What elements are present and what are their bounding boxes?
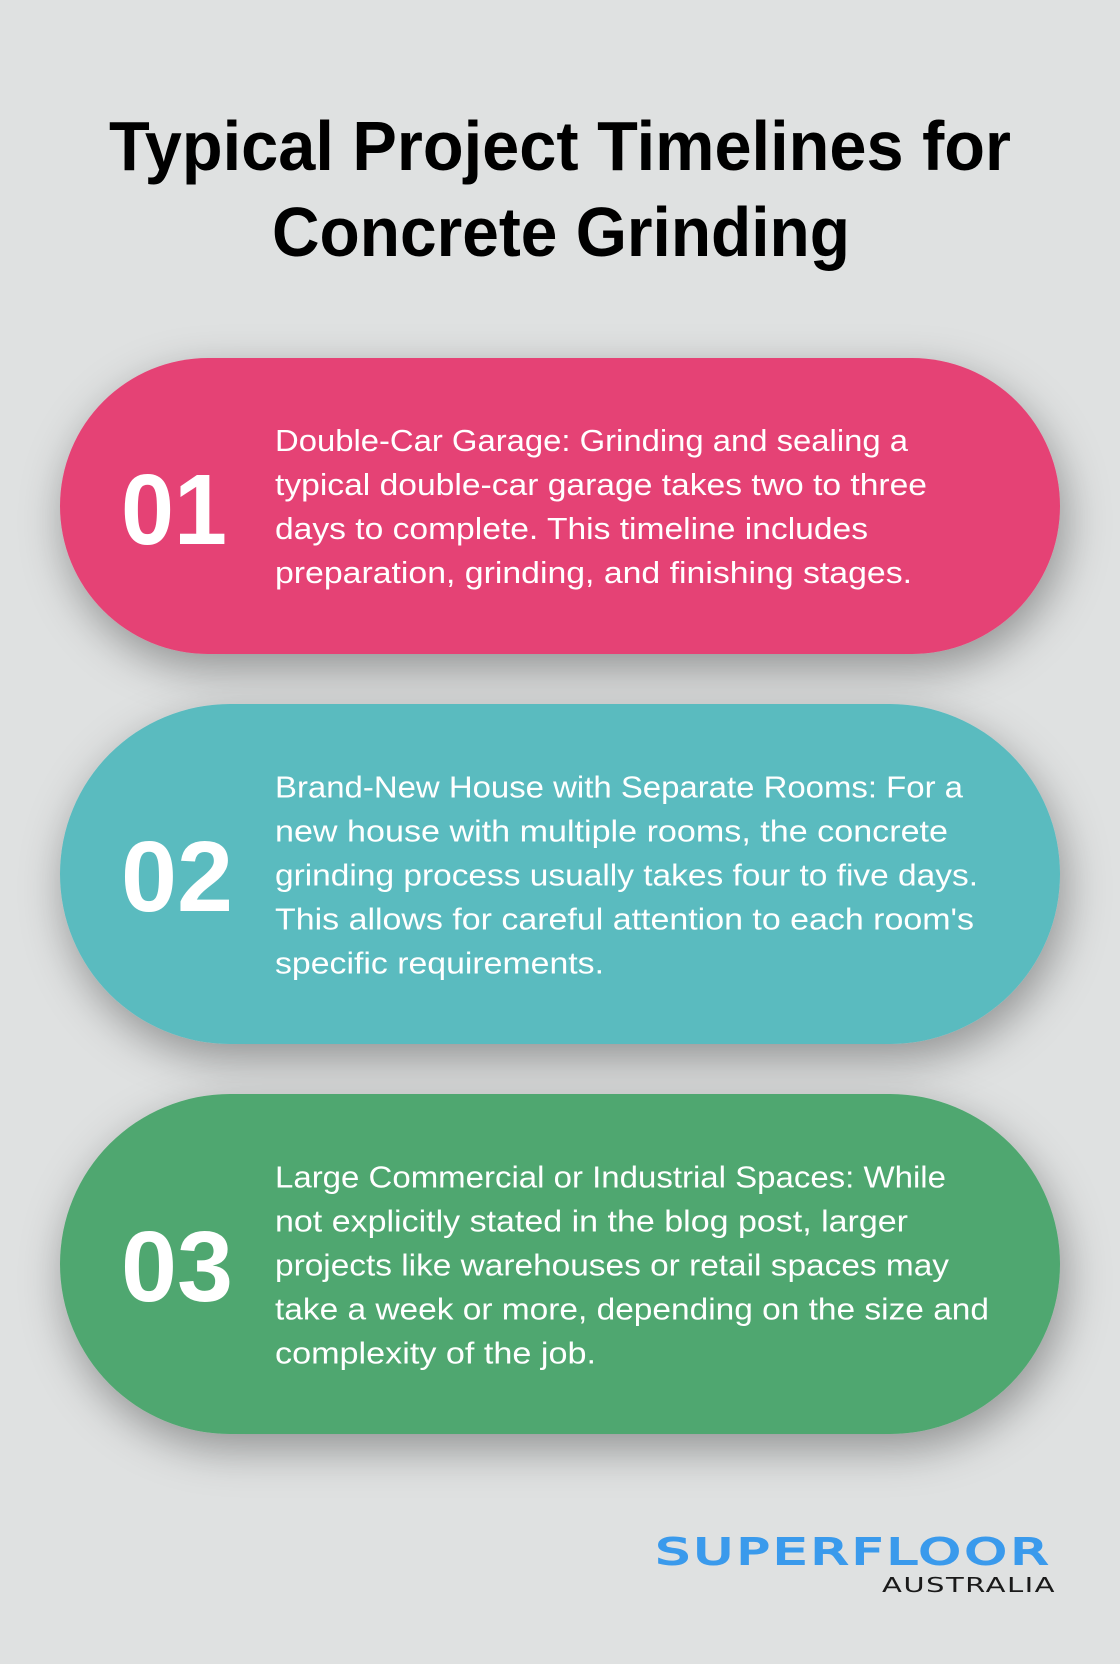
panel: step 02 brand-new house — [60, 704, 1060, 1044]
step 02 description: grinding process usually takes four to five days. — [275, 858, 978, 892]
step 03 description: Large Commercial or Industrial Spaces: While — [275, 1160, 946, 1194]
number 03: 03 — [121, 1211, 233, 1323]
step 01 description: Double-Car Garage: Grinding and sealing a — [275, 423, 909, 458]
step 03 description: not explicitly stated in the blog post, larger — [275, 1204, 908, 1238]
step 01 description: typical double-car garage takes two to three — [275, 467, 927, 502]
panel: step 03 large commercial spaces — [60, 1094, 1060, 1434]
title — [109, 107, 1011, 271]
pill background pink — [60, 358, 1060, 654]
step 02 description: This allows for careful attention to each room's — [275, 902, 974, 936]
pill background green — [60, 1094, 1060, 1434]
step 02 description — [275, 770, 978, 980]
number 01: 01 — [121, 454, 227, 566]
number 02: 02 — [121, 821, 233, 933]
logo: Superfloor Australia: SUPERFLOOR — [656, 1532, 1052, 1573]
step 02 description: new house with multiple rooms, the concrete — [275, 814, 948, 848]
panel: step 01 double-car garage — [60, 358, 1060, 654]
step 01 description: days to complete. This timeline includes — [275, 511, 868, 546]
logo: Superfloor Australia — [656, 1532, 1056, 1597]
pill background teal — [60, 704, 1060, 1044]
title: Concrete Grinding — [272, 193, 850, 271]
title: Typical Project Timelines for — [109, 107, 1011, 185]
step 02 description: specific requirements. — [275, 946, 604, 980]
logo: Superfloor Australia: AUSTRALIA — [882, 1573, 1056, 1597]
step 01 description — [275, 423, 927, 590]
step 03 description — [275, 1160, 989, 1370]
step 01 description: preparation, grinding, and finishing stages. — [275, 555, 912, 590]
step 03 description: projects like warehouses or retail spaces may — [275, 1248, 950, 1282]
step 03 description: complexity of the job. — [275, 1336, 596, 1370]
step 03 description: take a week or more, depending on the size and — [275, 1292, 989, 1326]
step 02 description: Brand-New House with Separate Rooms: For a — [275, 770, 964, 804]
